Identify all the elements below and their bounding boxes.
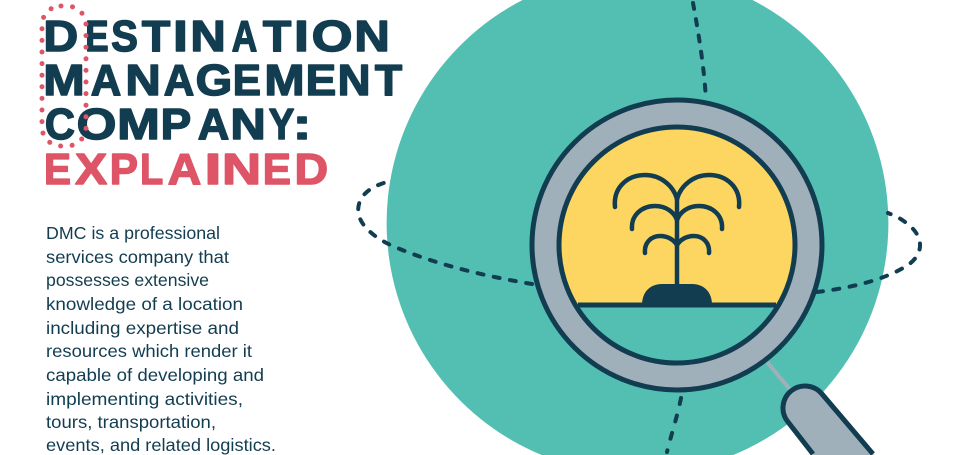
title — [43, 12, 402, 194]
title line: EXPLAINED: E — [44, 145, 71, 194]
title line: DESTINATION: I — [294, 12, 309, 61]
island mound — [642, 284, 712, 305]
description text: implementing activities, — [46, 389, 243, 409]
title line: EXPLAINED: D — [294, 145, 328, 194]
title line: DESTINATION: I — [173, 12, 188, 61]
title line: EXPLAINED: E — [263, 145, 291, 194]
description text: services company that — [46, 247, 229, 267]
title line: MANAGEMENT: A — [164, 56, 194, 105]
title line: MANAGEMENT: N — [125, 56, 161, 105]
title line: DESTINATION: D — [43, 12, 78, 61]
description text: DMC is a professional — [46, 223, 220, 243]
description text: capable of developing and — [46, 365, 264, 385]
title line: EXPLAINED: L — [140, 145, 163, 194]
title line: MANAGEMENT: T — [375, 56, 402, 105]
title line: EXPLAINED: N — [222, 145, 261, 194]
description text: including expertise and — [46, 318, 239, 338]
title line: EXPLAINED: A — [168, 145, 201, 194]
title line: MANAGEMENT: E — [306, 56, 336, 105]
title line: MANAGEMENT: E — [233, 56, 261, 105]
title line: DESTINATION: O — [312, 12, 353, 61]
title line: MANAGEMENT: M — [264, 56, 305, 105]
title line: EXPLAINED: I — [204, 145, 221, 194]
description text: resources which render it — [46, 341, 252, 361]
title line: COMPANY:: : — [293, 100, 311, 149]
title line: DESTINATION: S — [111, 12, 138, 61]
fountain — [615, 175, 739, 286]
lens rim — [532, 100, 822, 390]
title line: EXPLAINED: P — [110, 145, 138, 194]
title line: MANAGEMENT: G — [196, 56, 232, 105]
title line: COMPANY:: A — [198, 100, 229, 149]
title line: COMPANY:: Y — [269, 100, 294, 149]
description text: tours, transportation, — [46, 412, 216, 432]
description text: events, and related logistics. — [46, 435, 276, 455]
title line: DESTINATION: N — [190, 12, 226, 61]
horizon — [578, 302, 776, 308]
title line: MANAGEMENT: M — [43, 56, 85, 105]
yellow sky — [559, 127, 795, 305]
orbit: bottom dashed line — [667, 398, 681, 452]
description text: knowledge of a location — [46, 294, 243, 314]
title line: COMPANY:: P — [161, 100, 191, 149]
lens interior — [559, 127, 795, 363]
title line: COMPANY:: N — [230, 100, 266, 149]
handle connector — [767, 362, 792, 392]
orbit: right dashed line — [817, 213, 920, 292]
globe circle — [387, 0, 888, 455]
title line: DESTINATION — [43, 12, 390, 61]
title line: EXPLAINED — [44, 145, 328, 194]
title line: MANAGEMENT — [43, 56, 402, 105]
title line: MANAGEMENT: N — [338, 56, 370, 105]
title line: DESTINATION: A — [232, 12, 257, 61]
title line: COMPANY:: C — [45, 100, 75, 149]
title line: COMPANY: — [45, 100, 311, 149]
title line: EXPLAINED: X — [75, 145, 107, 194]
title line: DESTINATION: T — [142, 12, 170, 61]
title line: DESTINATION: T — [263, 12, 291, 61]
title line: COMPANY:: M — [117, 100, 160, 149]
orbit: top dashed line — [693, 3, 706, 100]
magnifying glass — [532, 100, 874, 455]
orbit: left dashed line — [358, 181, 532, 284]
description text — [46, 223, 276, 455]
title line: DESTINATION: N — [354, 12, 390, 61]
title line: COMPANY:: O — [77, 100, 116, 149]
description text: possesses extensive — [46, 270, 209, 290]
dotted highlight around DMC initials — [42, 6, 86, 146]
title line: MANAGEMENT: A — [91, 56, 121, 105]
title line: DESTINATION: E — [85, 12, 109, 61]
handle — [783, 386, 874, 455]
